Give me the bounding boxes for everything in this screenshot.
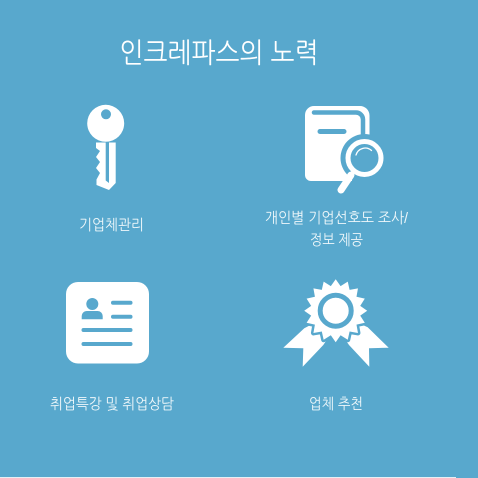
- title: 인크레파스의 노력: [120, 38, 318, 68]
- icon: award rosette: [283, 279, 389, 367]
- label: company management: 기업체관리: [79, 217, 144, 234]
- icon: key: [87, 105, 124, 190]
- icon: document with magnifier: [305, 106, 388, 190]
- label: company recommendation: 업체 추천: [309, 396, 363, 413]
- icon: resume card: [66, 282, 149, 364]
- label: preference survey: 정보 제공: [310, 232, 363, 249]
- label: preference survey: 개인별 기업선호도 조사/: [265, 210, 409, 227]
- label: career lecture and counseling: 취업특강 및 취업상담: [50, 396, 175, 413]
- label: preference survey: [265, 210, 409, 249]
